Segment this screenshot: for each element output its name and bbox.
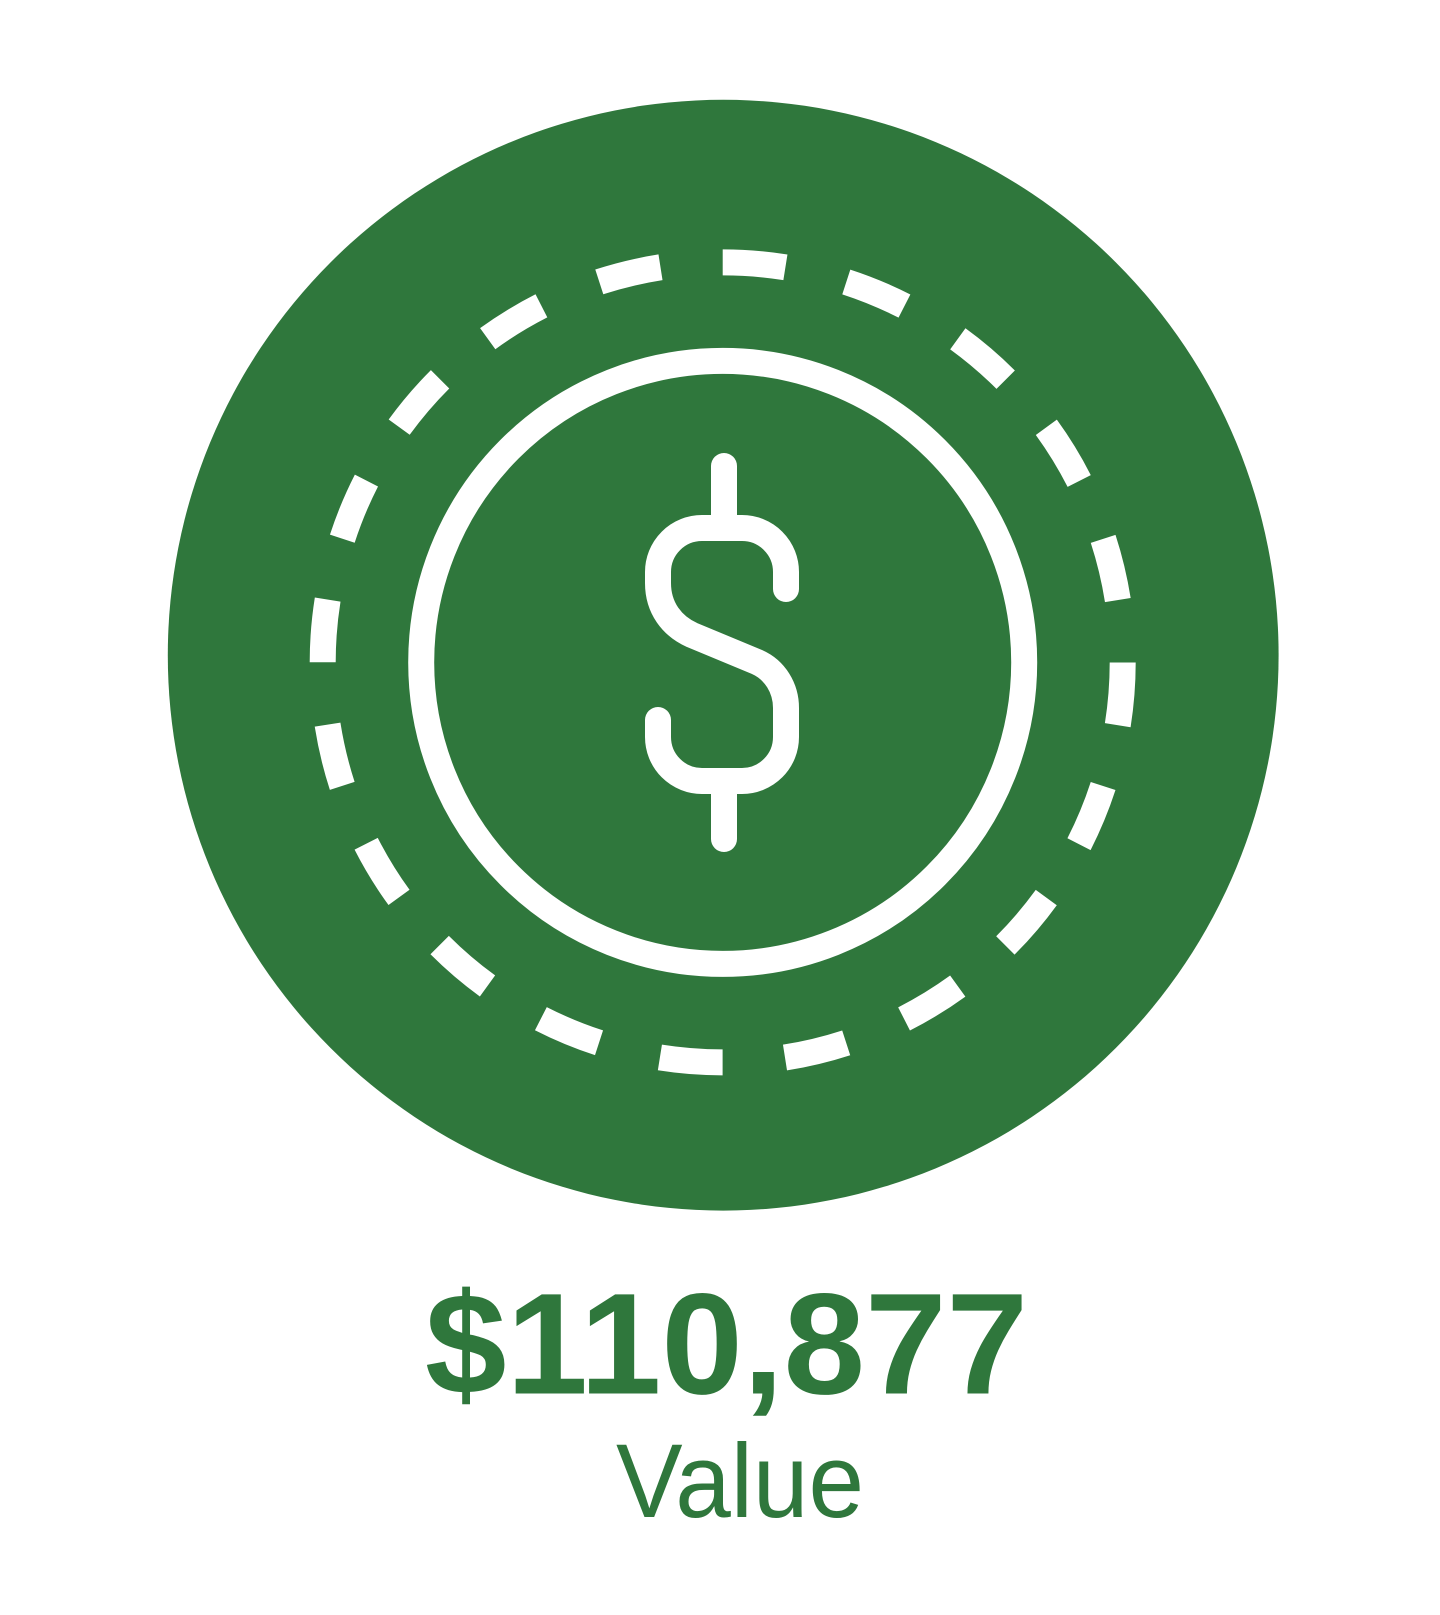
dashed outer ring — [323, 262, 1123, 1062]
amount label: Value — [616, 1423, 864, 1540]
dollar symbol — [658, 466, 786, 839]
coin background circle — [168, 100, 1279, 1211]
icon: coin with dollar sign — [168, 100, 1279, 1211]
amount figure: $110,877 — [425, 1264, 1028, 1424]
solid inner ring — [421, 361, 1024, 964]
